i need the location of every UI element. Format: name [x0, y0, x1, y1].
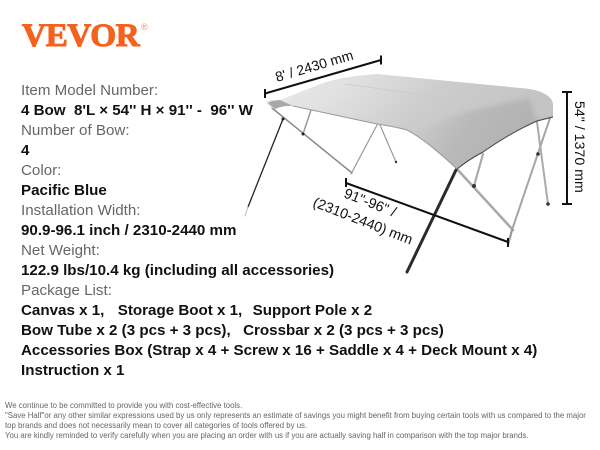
color value: Pacific Blue [21, 182, 107, 199]
package line 3: Accessories Box (Strap x 4 + Screw x 16 + Saddle x 4 + Deck Mount x 4) [21, 342, 537, 359]
net weight: Net Weight: [21, 242, 100, 259]
dimension: width [346, 178, 508, 247]
package list: Package List: [21, 282, 112, 299]
footer disclaimer: top brands and does not necessarily mean to cover all categories of tools offered by us. [5, 421, 307, 430]
number of bow: Number of Bow: [21, 122, 130, 139]
footer disclaimer [5, 401, 586, 440]
package line 1: Canvas x 1, Storage Boot x 1, Support Pole x 2 [21, 302, 372, 319]
specification list [21, 82, 537, 379]
dimension: length [265, 56, 381, 98]
dimension: height [562, 92, 572, 204]
package line 4: Instruction x 1 [21, 362, 124, 379]
product diagram: bimini top with dimensions [244, 52, 585, 274]
canopy [266, 74, 560, 174]
bow value: 4 [21, 142, 29, 159]
item model number: Item Model Number: [21, 82, 158, 99]
footer disclaimer: We continue to be committed to provide you with cost-effective tools. [5, 401, 242, 410]
dimension label: length: 8' / 2430 mm [273, 47, 355, 85]
footer disclaimer: You are kindly reminded to verify carefully when you are placing an order with us if you are actually saving half in comparison with the top major brands. [5, 431, 528, 440]
model value: 4 Bow 8'L × 54'' H × 91'' - 96'' W [21, 102, 253, 119]
installation width: Installation Width: [21, 202, 140, 219]
color: Color: [21, 162, 61, 179]
logo: ® [141, 22, 148, 32]
package line 2: Bow Tube x 2 (3 pcs + 3 pcs), Crossbar x 2 (3 pcs + 3 pcs) [21, 322, 444, 339]
weight value: 122.9 lbs/10.4 kg (including all accessories) [21, 262, 334, 279]
footer disclaimer: "Save Half"or any other similar expressions used by us only represents an estimate of savings you might benefit from buying certain tools with us compared to the major [5, 411, 586, 420]
width value: 90.9-96.1 inch / 2310-2440 mm [21, 222, 236, 239]
logo: VEVOR [22, 18, 139, 54]
frame poles [245, 108, 550, 272]
dimension label: width: 91"-96" / [342, 186, 398, 221]
dimension label: height: 54" / 1370 mm [571, 101, 587, 193]
dimension label: width: (2310-2440) mm [311, 195, 415, 248]
